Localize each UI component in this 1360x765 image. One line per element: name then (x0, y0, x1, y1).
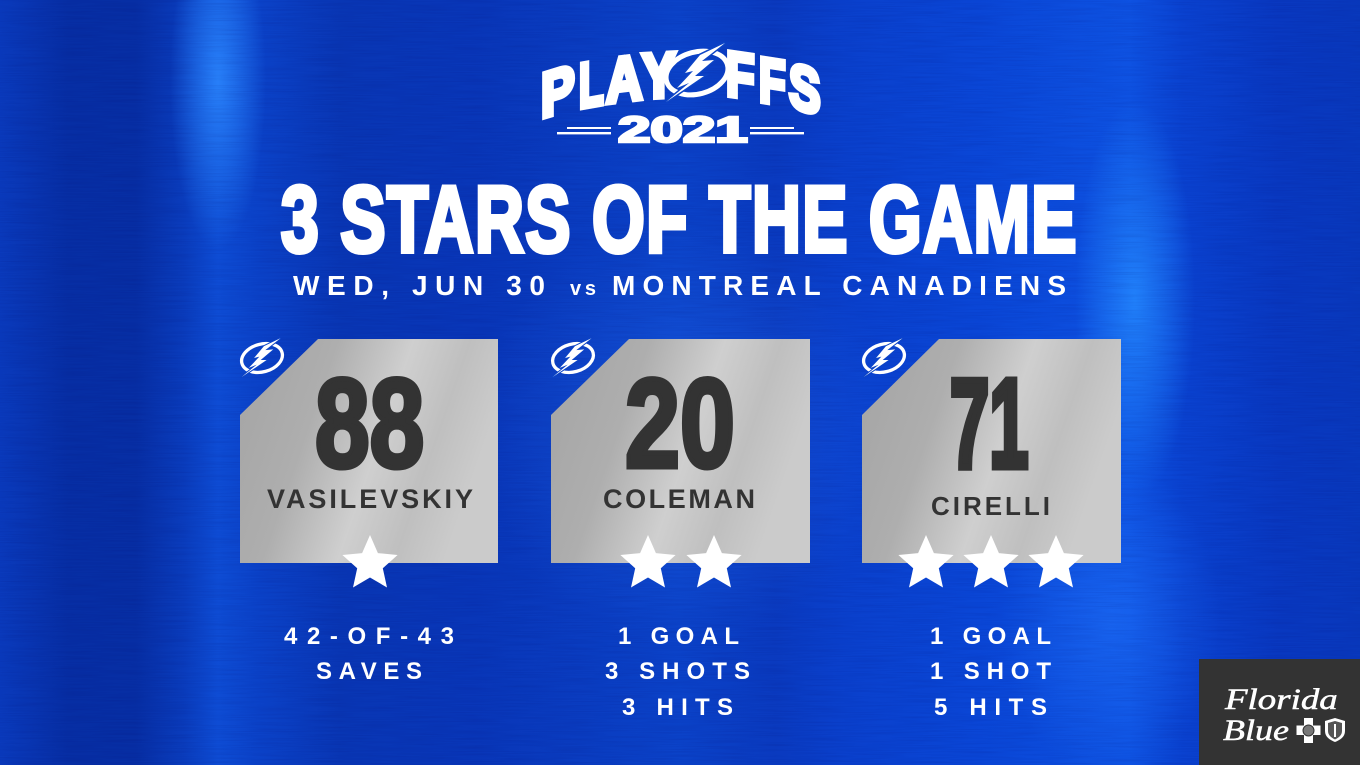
icon: cross (1296, 718, 1320, 743)
stats: 1 SHOT (930, 658, 1051, 685)
subtitle: date and opponent: WED, JUN 30 (293, 270, 545, 301)
title: 3 STARS OF THE GAME (281, 168, 1078, 272)
subtitle: date and opponent: vs (570, 278, 596, 300)
stats (605, 623, 750, 721)
card plate (862, 339, 1121, 563)
player name: CIRELLI (931, 491, 1050, 521)
stats: 42-OF-43 (284, 623, 454, 650)
logo: Playoffs 2021: F (759, 44, 786, 119)
stats: 1 GOAL (930, 623, 1051, 650)
subtitle: date and opponent: MONTREAL CANADIENS (612, 270, 1066, 301)
panel: star 2 Coleman (549, 338, 810, 721)
stats: 1 GOAL (618, 623, 739, 650)
logo: Playoffs 2021: L (579, 48, 604, 122)
player name: COLEMAN (603, 484, 755, 514)
panel: star 1 Vasilevskiy (238, 338, 498, 685)
jersey number: 71 (950, 353, 1028, 494)
stats: SAVES (316, 658, 422, 685)
star rating (342, 535, 398, 588)
stats: 5 HITS (934, 694, 1047, 721)
logo: Playoffs 2021 (541, 38, 821, 150)
stats: 3 SHOTS (605, 658, 750, 685)
icon: shield (1325, 718, 1345, 742)
stats: 3 HITS (622, 694, 733, 721)
sponsor: Florida Blue: Blue (1223, 714, 1289, 747)
player name: VASILEVSKIY (267, 484, 473, 514)
stats (930, 623, 1051, 721)
team icon (238, 338, 286, 377)
jersey number: 20 (625, 354, 735, 495)
logo: Playoffs 2021: Y (642, 40, 676, 112)
panel: star 3 Cirelli (860, 338, 1121, 721)
team icon (860, 338, 908, 377)
subtitle: date and opponent (293, 270, 1066, 301)
logo: Playoffs 2021: A (606, 42, 642, 117)
logo: Playoffs 2021: 2021 (618, 110, 748, 150)
logo: Playoffs 2021: P (541, 51, 575, 132)
sponsor: Florida Blue: Florida (1224, 683, 1338, 716)
stats (284, 623, 454, 685)
star rating (898, 535, 1084, 588)
logo: Playoffs 2021: S (789, 49, 821, 128)
card plate (240, 339, 498, 563)
team icon (549, 338, 597, 377)
sponsor: Florida Blue (1199, 659, 1360, 765)
star rating (620, 535, 742, 588)
jersey number: 88 (315, 353, 424, 494)
card plate (551, 339, 810, 563)
logo: Playoffs 2021: F (726, 38, 754, 113)
